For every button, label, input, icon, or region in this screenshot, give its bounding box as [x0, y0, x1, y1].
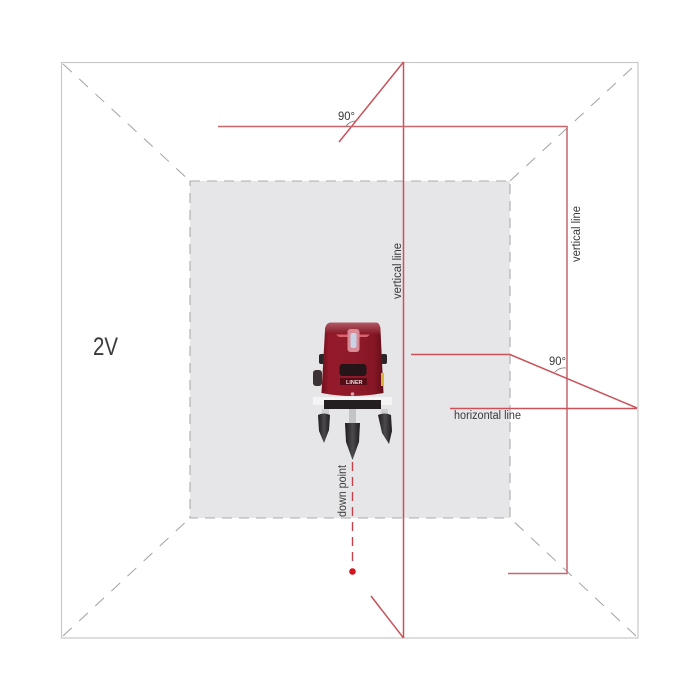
back wall dashed border	[190, 181, 510, 518]
device top accent	[336, 334, 370, 337]
down point laser dashes	[352, 462, 354, 566]
laser lines: central vertical plane	[339, 62, 404, 638]
device right foot	[381, 409, 388, 416]
device brand plate	[340, 378, 367, 385]
device yellow side mark	[381, 373, 384, 386]
label: vertical line right: vertical line	[571, 206, 583, 262]
device centre mark	[351, 392, 354, 396]
laser lines: horizontal plane	[411, 354, 637, 408]
back wall panel	[190, 181, 510, 518]
down point dot	[349, 568, 356, 575]
model label 2V: 2V	[93, 333, 118, 361]
device red body	[322, 322, 384, 396]
angle label top: 90°	[338, 109, 355, 123]
label: horizontal line: horizontal line	[454, 410, 521, 422]
laser level device: LINER	[346, 380, 363, 386]
label: down point: down point	[335, 464, 349, 517]
room outline	[62, 62, 638, 638]
angle label right: 90°	[549, 354, 566, 368]
device dark display window	[340, 364, 366, 376]
device base plate	[313, 397, 392, 405]
device left foot	[322, 409, 329, 416]
dashed room corner lines	[63, 64, 636, 636]
device side knob	[313, 370, 322, 386]
angle arc right	[555, 368, 566, 372]
laser level device	[313, 322, 392, 460]
device top cap	[325, 322, 380, 334]
label: vertical line centre: vertical line	[392, 243, 404, 299]
angle arc top	[346, 121, 356, 126]
device laser window	[348, 329, 360, 352]
device centre foot	[349, 409, 356, 424]
device side clips	[319, 354, 325, 364]
laser lines: side vertical plane	[218, 126, 567, 574]
